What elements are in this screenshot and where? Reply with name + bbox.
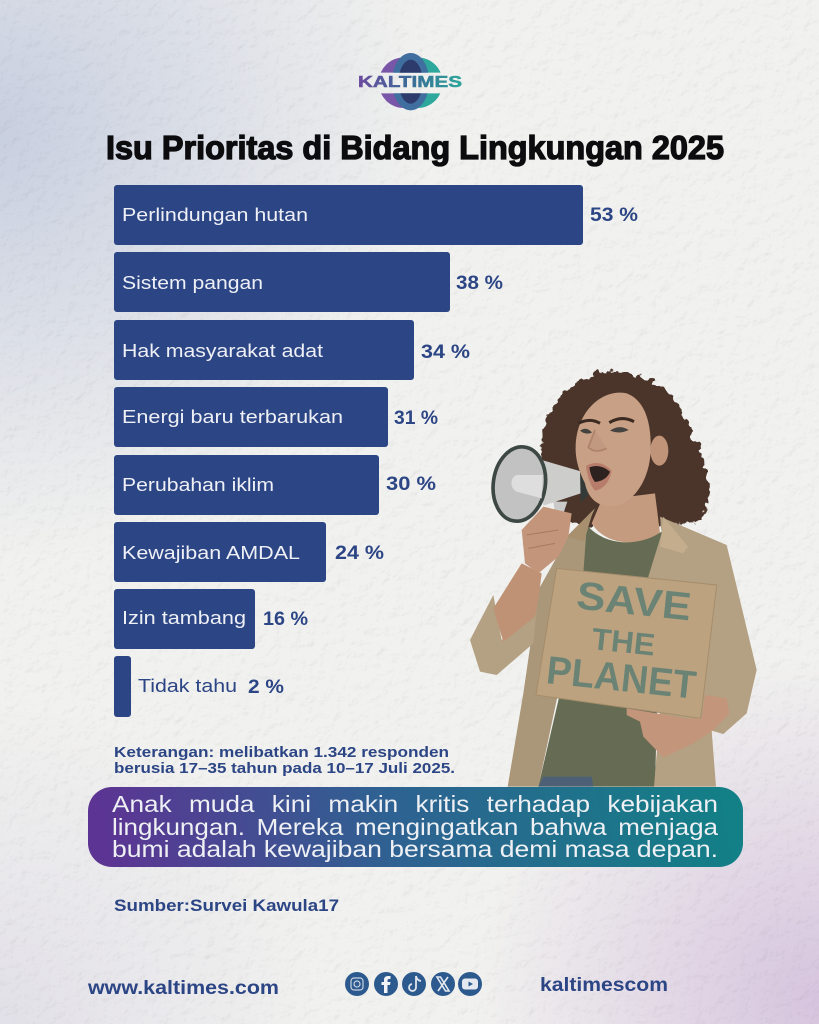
bar: Perubahan iklim: 30 % — [386, 474, 436, 495]
bar: Kewajiban AMDAL: Kewajiban AMDAL — [122, 542, 300, 563]
panel: statement: bumi adalah kewajiban bersama demi masa depan. — [112, 836, 718, 862]
bar: Energi baru terbarukan — [114, 387, 438, 447]
face — [576, 393, 651, 506]
sign: SAVE — [574, 574, 693, 629]
icon: instagram — [345, 972, 369, 996]
neck — [592, 493, 660, 542]
bar: Tidak tahu: 2 % — [248, 677, 284, 698]
ear — [650, 436, 668, 466]
eyebrows — [578, 419, 634, 423]
bar: Kewajiban AMDAL — [114, 522, 384, 582]
icon: tiktok — [402, 972, 426, 996]
note: respondents: Keterangan: melibatkan 1.342 responden — [114, 744, 449, 761]
bar: Izin tambang: 16 % — [263, 609, 308, 630]
eyes — [580, 427, 629, 434]
bar chart — [114, 185, 638, 717]
hair — [541, 371, 709, 525]
jacket — [508, 508, 595, 787]
icon: X — [431, 972, 455, 996]
bar: Energi baru terbarukan: Energi baru terbarukan — [122, 406, 343, 427]
panel: statement — [88, 787, 743, 867]
bar: Hak masyarakat adat — [114, 320, 470, 380]
bar: Tidak tahu — [114, 656, 284, 717]
logo: Kaltimes: KALTIMES — [358, 74, 462, 91]
bar: Hak masyarakat adat: 34 % — [421, 342, 470, 363]
bar: Perlindungan hutan: 53 % — [590, 205, 638, 226]
bar: Sistem pangan — [114, 252, 503, 312]
bar: Izin tambang — [114, 589, 308, 649]
bar: Izin tambang: Izin tambang — [122, 607, 246, 628]
icon: youtube — [458, 972, 482, 996]
title: Isu Prioritas di Bidang Lingkungan 2025 — [106, 129, 724, 166]
forearm — [493, 563, 542, 642]
bar: Perlindungan hutan — [114, 185, 638, 245]
logo: Kaltimes — [358, 53, 462, 110]
illustration: young woman with megaphone and sign — [470, 371, 757, 787]
bar: Perubahan iklim — [114, 455, 436, 515]
bar: Energi baru terbarukan: 31 % — [394, 408, 438, 429]
nose — [588, 430, 607, 451]
bar: Perlindungan hutan: Perlindungan hutan — [122, 204, 308, 225]
bar: Tidak tahu: Tidak tahu — [138, 675, 237, 696]
bar: Sistem pangan: Sistem pangan — [122, 272, 263, 293]
sign — [536, 568, 717, 718]
social icons — [345, 972, 482, 996]
sign: PLANET — [544, 648, 698, 708]
hand on megaphone — [522, 507, 572, 573]
bar: Sistem pangan: 38 % — [456, 273, 503, 294]
website: www.kaltimes.com — [87, 978, 279, 999]
megaphone — [488, 443, 589, 562]
hand holding sign — [627, 695, 729, 757]
mouth — [586, 463, 612, 491]
social handle: kaltimescom — [540, 975, 668, 996]
bar: Perubahan iklim: Perubahan iklim — [122, 474, 274, 495]
rolled sleeve — [470, 593, 538, 675]
bar: Hak masyarakat adat: Hak masyarakat adat — [122, 340, 323, 361]
note: respondents: berusia 17–35 tahun pada 10–17 Juli 2025. — [114, 760, 455, 777]
bar: Kewajiban AMDAL: 24 % — [335, 543, 384, 564]
panel: statement: Anak muda kini makin kritis terhadap kebijakan — [112, 791, 718, 817]
note: respondents — [114, 744, 455, 777]
shirt — [538, 527, 662, 787]
icon: facebook — [374, 972, 398, 996]
panel: statement: lingkungan. Mereka mengingatkan bahwa menjaga — [112, 814, 719, 840]
sign: THE — [590, 622, 657, 663]
source: Sumber:Survei Kawula17 — [114, 897, 339, 915]
